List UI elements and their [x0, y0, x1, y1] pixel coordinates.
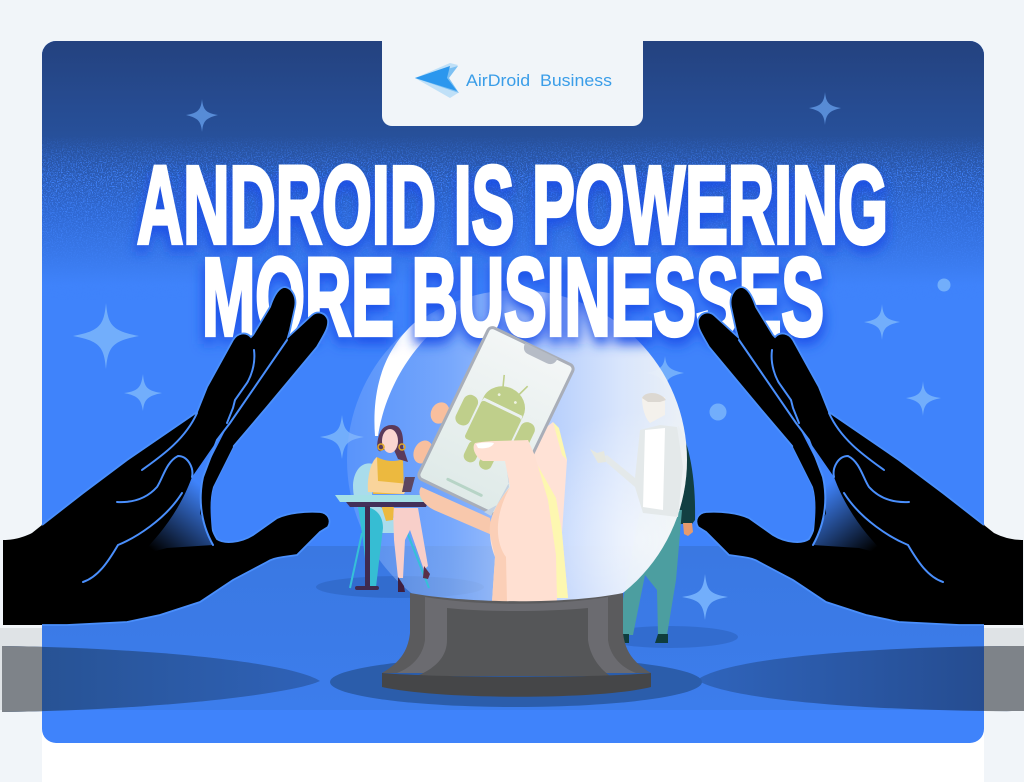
silhouette	[3, 287, 330, 625]
star 5	[864, 304, 900, 340]
shadow: right hand	[697, 646, 1024, 711]
arm	[368, 457, 409, 494]
shadow: man	[602, 626, 738, 648]
device	[402, 477, 415, 492]
phone notch	[521, 343, 558, 367]
hand	[683, 523, 693, 536]
floor band	[42, 546, 984, 710]
phone	[417, 326, 575, 518]
star 9	[646, 356, 684, 389]
yellow edge	[533, 457, 568, 598]
dot 2	[710, 404, 726, 420]
shoes	[622, 634, 629, 643]
silhouette	[696, 287, 1023, 625]
outline	[696, 287, 984, 625]
orb highlight	[374, 318, 440, 436]
lower palm	[419, 487, 492, 535]
table	[335, 495, 424, 502]
shadow: orb base	[330, 657, 702, 707]
finger gap solid	[793, 425, 826, 545]
star 3	[186, 99, 218, 132]
star 1	[73, 303, 139, 369]
shadow: left hand	[2, 646, 320, 712]
arm shade	[490, 487, 510, 602]
palm and thumb over phone	[474, 440, 557, 602]
home bar	[446, 477, 483, 497]
dress	[373, 457, 404, 494]
chair seat	[358, 507, 383, 587]
figure: woman at table	[335, 425, 430, 592]
hair	[642, 393, 666, 402]
thumb nail	[476, 442, 494, 448]
crease lines	[83, 340, 287, 582]
title	[137, 144, 888, 359]
outline	[42, 287, 330, 625]
chair back	[353, 463, 408, 533]
skirt	[381, 505, 394, 521]
orb base	[382, 593, 651, 697]
trousers	[622, 510, 682, 635]
phone shadow from palm	[484, 462, 520, 516]
jacket and arm	[603, 425, 683, 517]
shadow: woman	[316, 576, 484, 598]
star 7	[320, 415, 364, 459]
shoes	[398, 577, 405, 592]
logo tab	[382, 41, 643, 126]
face	[382, 429, 398, 453]
star 8	[682, 574, 728, 620]
legs	[393, 508, 428, 578]
right hand	[696, 287, 1023, 625]
head	[642, 397, 665, 423]
star 6	[906, 381, 941, 416]
icon: android robot	[440, 364, 551, 482]
hand	[590, 449, 606, 463]
jacket back	[670, 425, 695, 524]
icon: AirDroid arrow	[415, 63, 459, 98]
figure: man, parts behind orb	[622, 425, 695, 643]
hair	[377, 425, 408, 462]
crystal orb	[347, 290, 687, 630]
chair legs	[350, 527, 429, 588]
dot 1	[938, 278, 950, 292]
star 2	[124, 374, 162, 411]
title glow	[135, 151, 890, 366]
finger 2	[410, 437, 436, 467]
crease lines	[739, 340, 943, 582]
left hand	[3, 287, 330, 625]
shirt	[643, 428, 665, 510]
palm gap	[140, 425, 228, 555]
finger 1	[427, 399, 453, 427]
finger gap solid	[200, 425, 233, 545]
palm gap	[798, 425, 886, 555]
earrings	[378, 444, 384, 450]
figure: man, washed by orb	[590, 393, 683, 517]
logo wordmark: AirDroid Business	[466, 71, 612, 90]
back finger	[500, 422, 568, 598]
star 4	[809, 92, 841, 125]
stars and dots	[73, 92, 950, 620]
hand holding phone, back parts	[410, 399, 568, 598]
